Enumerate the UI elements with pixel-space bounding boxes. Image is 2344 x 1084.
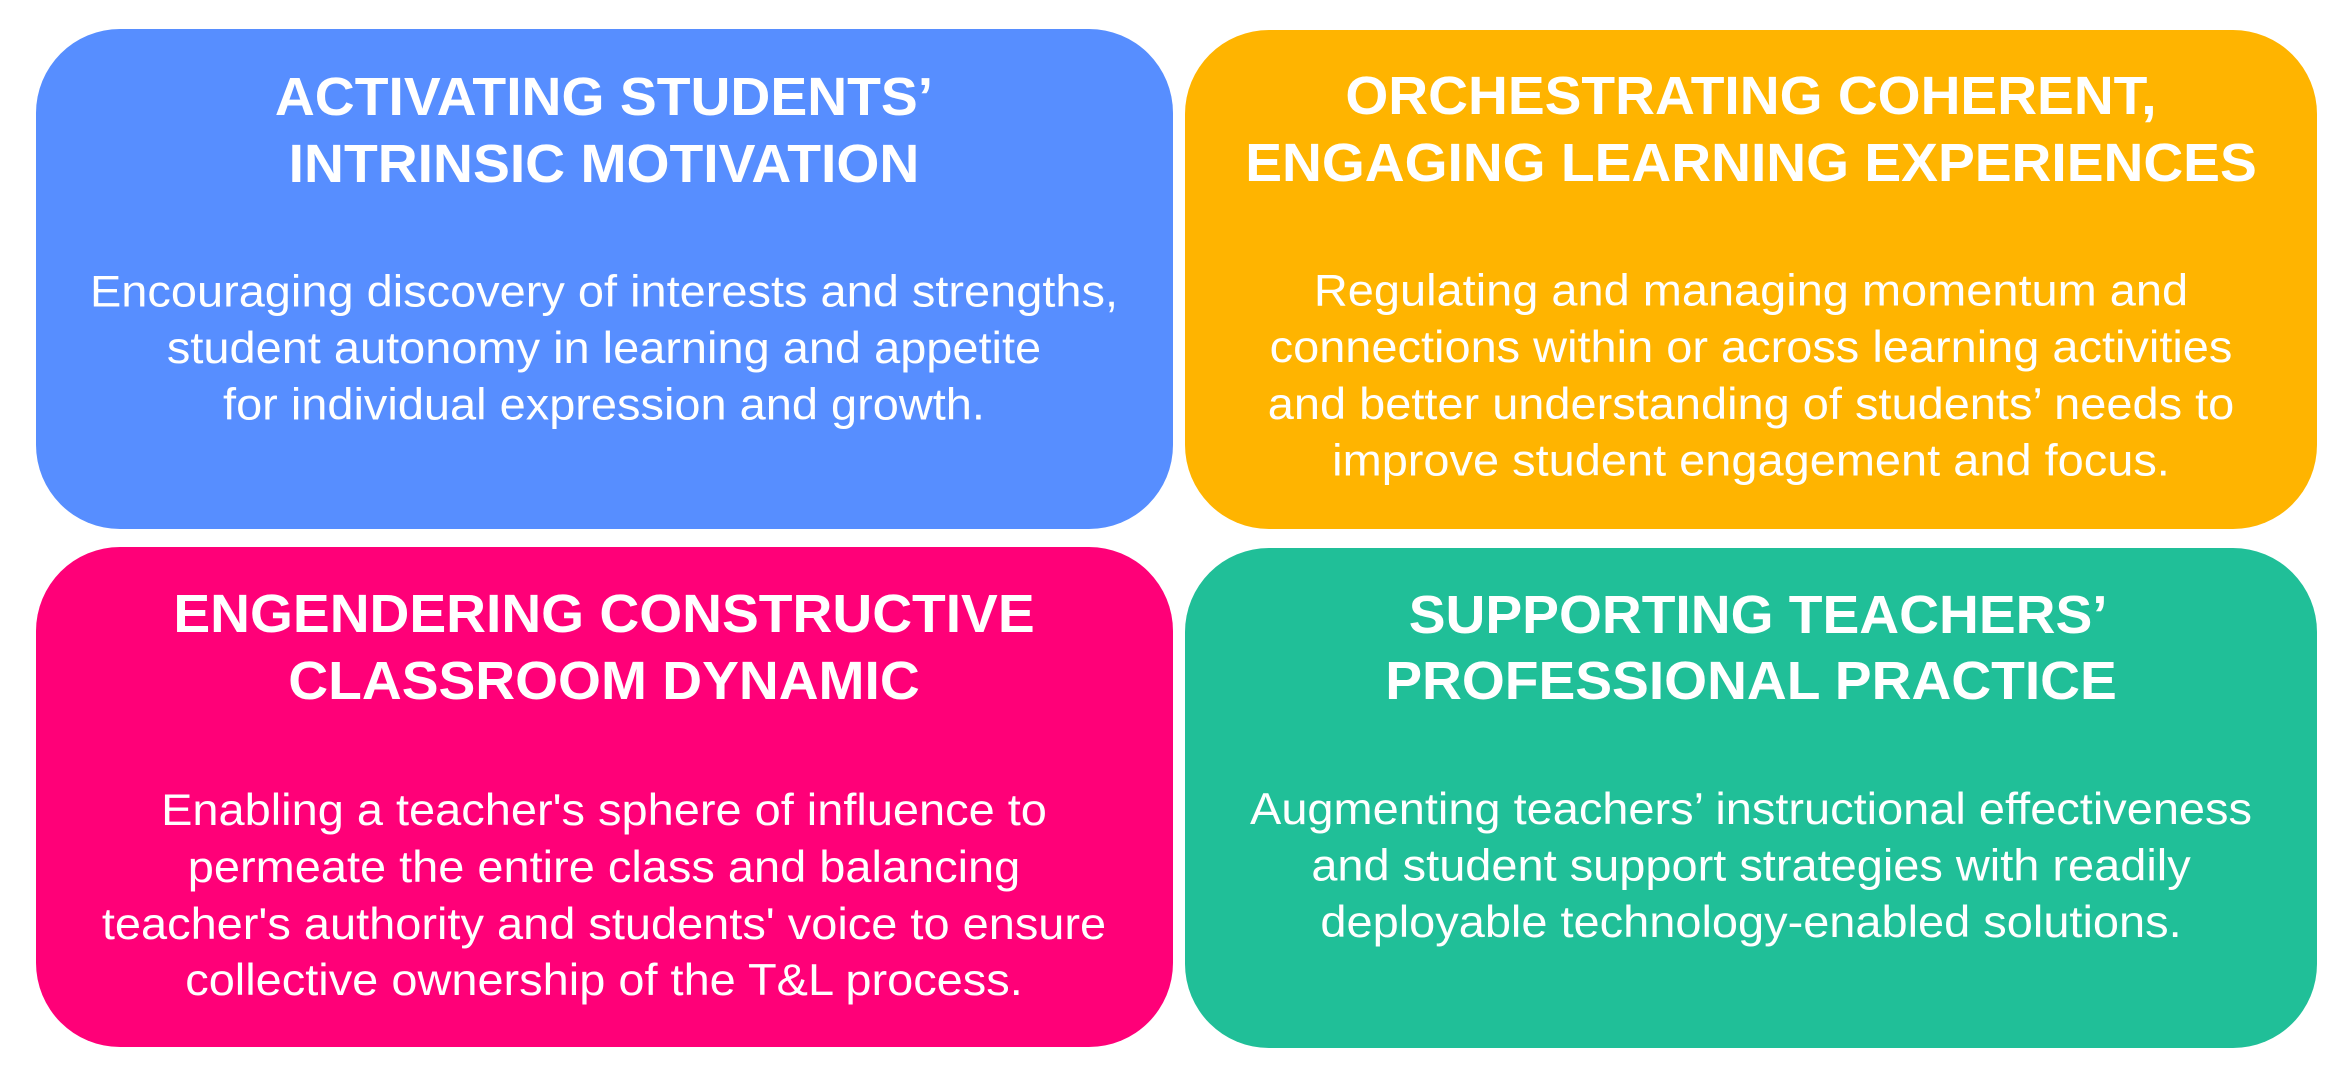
- text block: supporting description: deployable technology-enabled solutions.: [1320, 897, 2182, 947]
- panel: supporting teachers' professional practice: [1185, 548, 2317, 1048]
- heading: activating students' intrinsic motivation: INTRINSIC MOTIVATION: [289, 134, 919, 194]
- text block: activating description: for individual expression and growth.: [223, 380, 985, 429]
- text block: orchestrating description: [1268, 266, 2234, 485]
- text block: orchestrating description: and better understanding of students’ needs to: [1268, 379, 2234, 429]
- heading: supporting teachers' professional practice: [1385, 585, 2117, 711]
- heading: orchestrating coherent, engaging learning experiences: [1245, 66, 2257, 193]
- text block: orchestrating description: Regulating and managing momentum and: [1314, 266, 2188, 315]
- heading: orchestrating coherent, engaging learning experiences: ENGAGING LEARNING EXPERIENCES: [1245, 133, 2257, 193]
- panel: activating students' intrinsic motivation: [36, 29, 1173, 529]
- panel: engendering constructive classroom dynamic: [36, 547, 1173, 1047]
- panel: orchestrating coherent, engaging learning experiences: [1185, 30, 2317, 529]
- heading: activating students' intrinsic motivation: [275, 67, 933, 194]
- text block: engendering description: permeate the entire class and balancing: [188, 842, 1020, 892]
- heading: engendering constructive classroom dynamic: [173, 584, 1035, 711]
- text block: supporting description: Augmenting teachers’ instructional effectiveness: [1250, 784, 2252, 834]
- text block: supporting description: and student support strategies with readily: [1311, 841, 2191, 890]
- heading: engendering constructive classroom dynamic: CLASSROOM DYNAMIC: [288, 651, 920, 711]
- text block: engendering description: [102, 785, 1106, 1005]
- heading: activating students' intrinsic motivation: ACTIVATING STUDENTS’: [275, 67, 933, 127]
- text block: engendering description: teacher's authority and students' voice to ensure: [102, 899, 1106, 949]
- text block: activating description: Encouraging discovery of interests and strengths,: [90, 267, 1118, 316]
- heading: orchestrating coherent, engaging learning experiences: ORCHESTRATING COHERENT,: [1345, 66, 2157, 126]
- text block: supporting description: [1250, 784, 2252, 947]
- text block: activating description: student autonomy in learning and appetite: [167, 323, 1041, 373]
- heading: engendering constructive classroom dynamic: ENGENDERING CONSTRUCTIVE: [173, 584, 1035, 644]
- text block: engendering description: collective ownership of the T&L process.: [185, 955, 1023, 1005]
- text block: engendering description: Enabling a teacher's sphere of influence to: [161, 785, 1047, 835]
- text block: orchestrating description: improve student engagement and focus.: [1332, 436, 2170, 485]
- heading: supporting teachers' professional practice: PROFESSIONAL PRACTICE: [1385, 651, 2117, 711]
- text block: activating description: [90, 267, 1118, 429]
- text block: orchestrating description: connections within or across learning activities: [1270, 322, 2232, 372]
- heading: supporting teachers' professional practice: SUPPORTING TEACHERS’: [1409, 585, 2108, 645]
